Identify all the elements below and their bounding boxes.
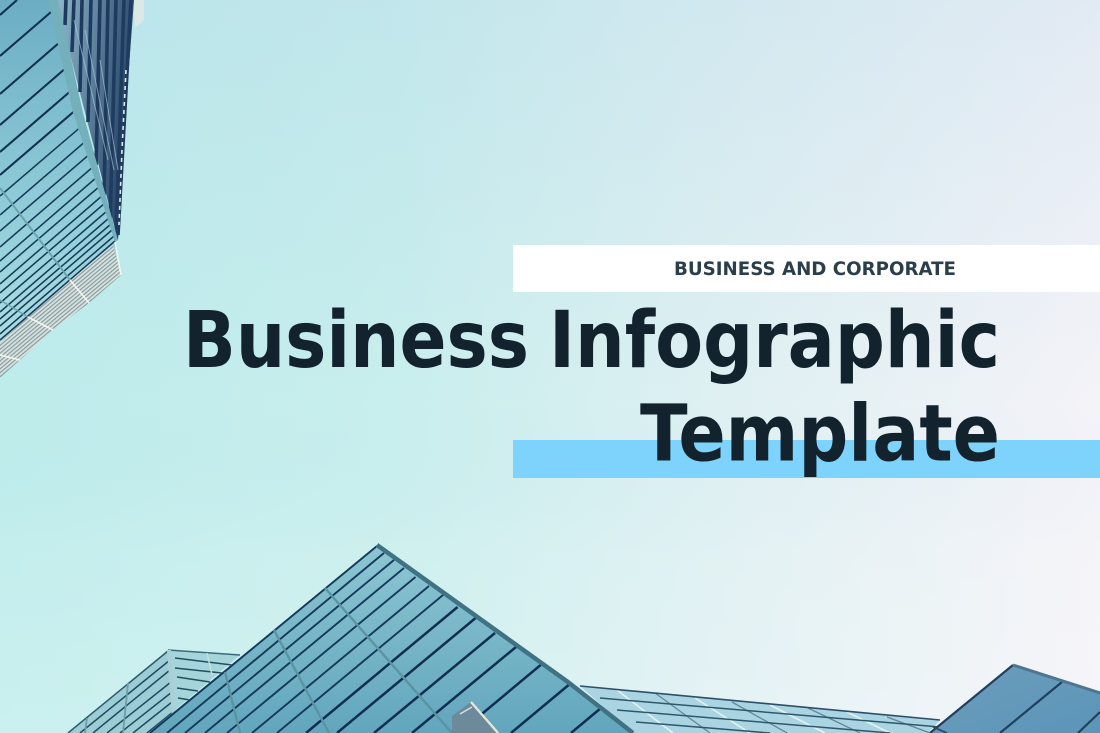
tower roof detail [133,0,144,28]
main roof window lines [150,546,443,733]
title line two: Template [640,390,1000,480]
tower corner strip [48,0,118,242]
small roof right face [148,650,240,733]
tower window lines [0,0,78,175]
title line one: Business [183,296,529,386]
building: main pyramid roof [148,545,633,733]
building: far-right roof [930,665,1100,733]
tower side face [56,0,134,240]
main roof ribs [225,588,452,733]
main roof right edge [377,545,633,733]
small roof left face [68,650,175,733]
building: top-left tower [0,0,144,378]
accent bar [513,440,1100,478]
tower glass face [0,0,121,378]
subtitle text: BUSINESS AND CORPORATE [674,259,956,280]
tower ribs [0,188,121,360]
title [183,296,1000,480]
main roof glass [148,545,633,733]
subtitle band [513,245,1100,292]
title line one: Infographic [549,296,1000,386]
building: small left roof [68,650,240,733]
building: rear-right roof [580,686,940,733]
tower light stripe band [0,245,121,378]
main roof reflection [452,702,498,733]
